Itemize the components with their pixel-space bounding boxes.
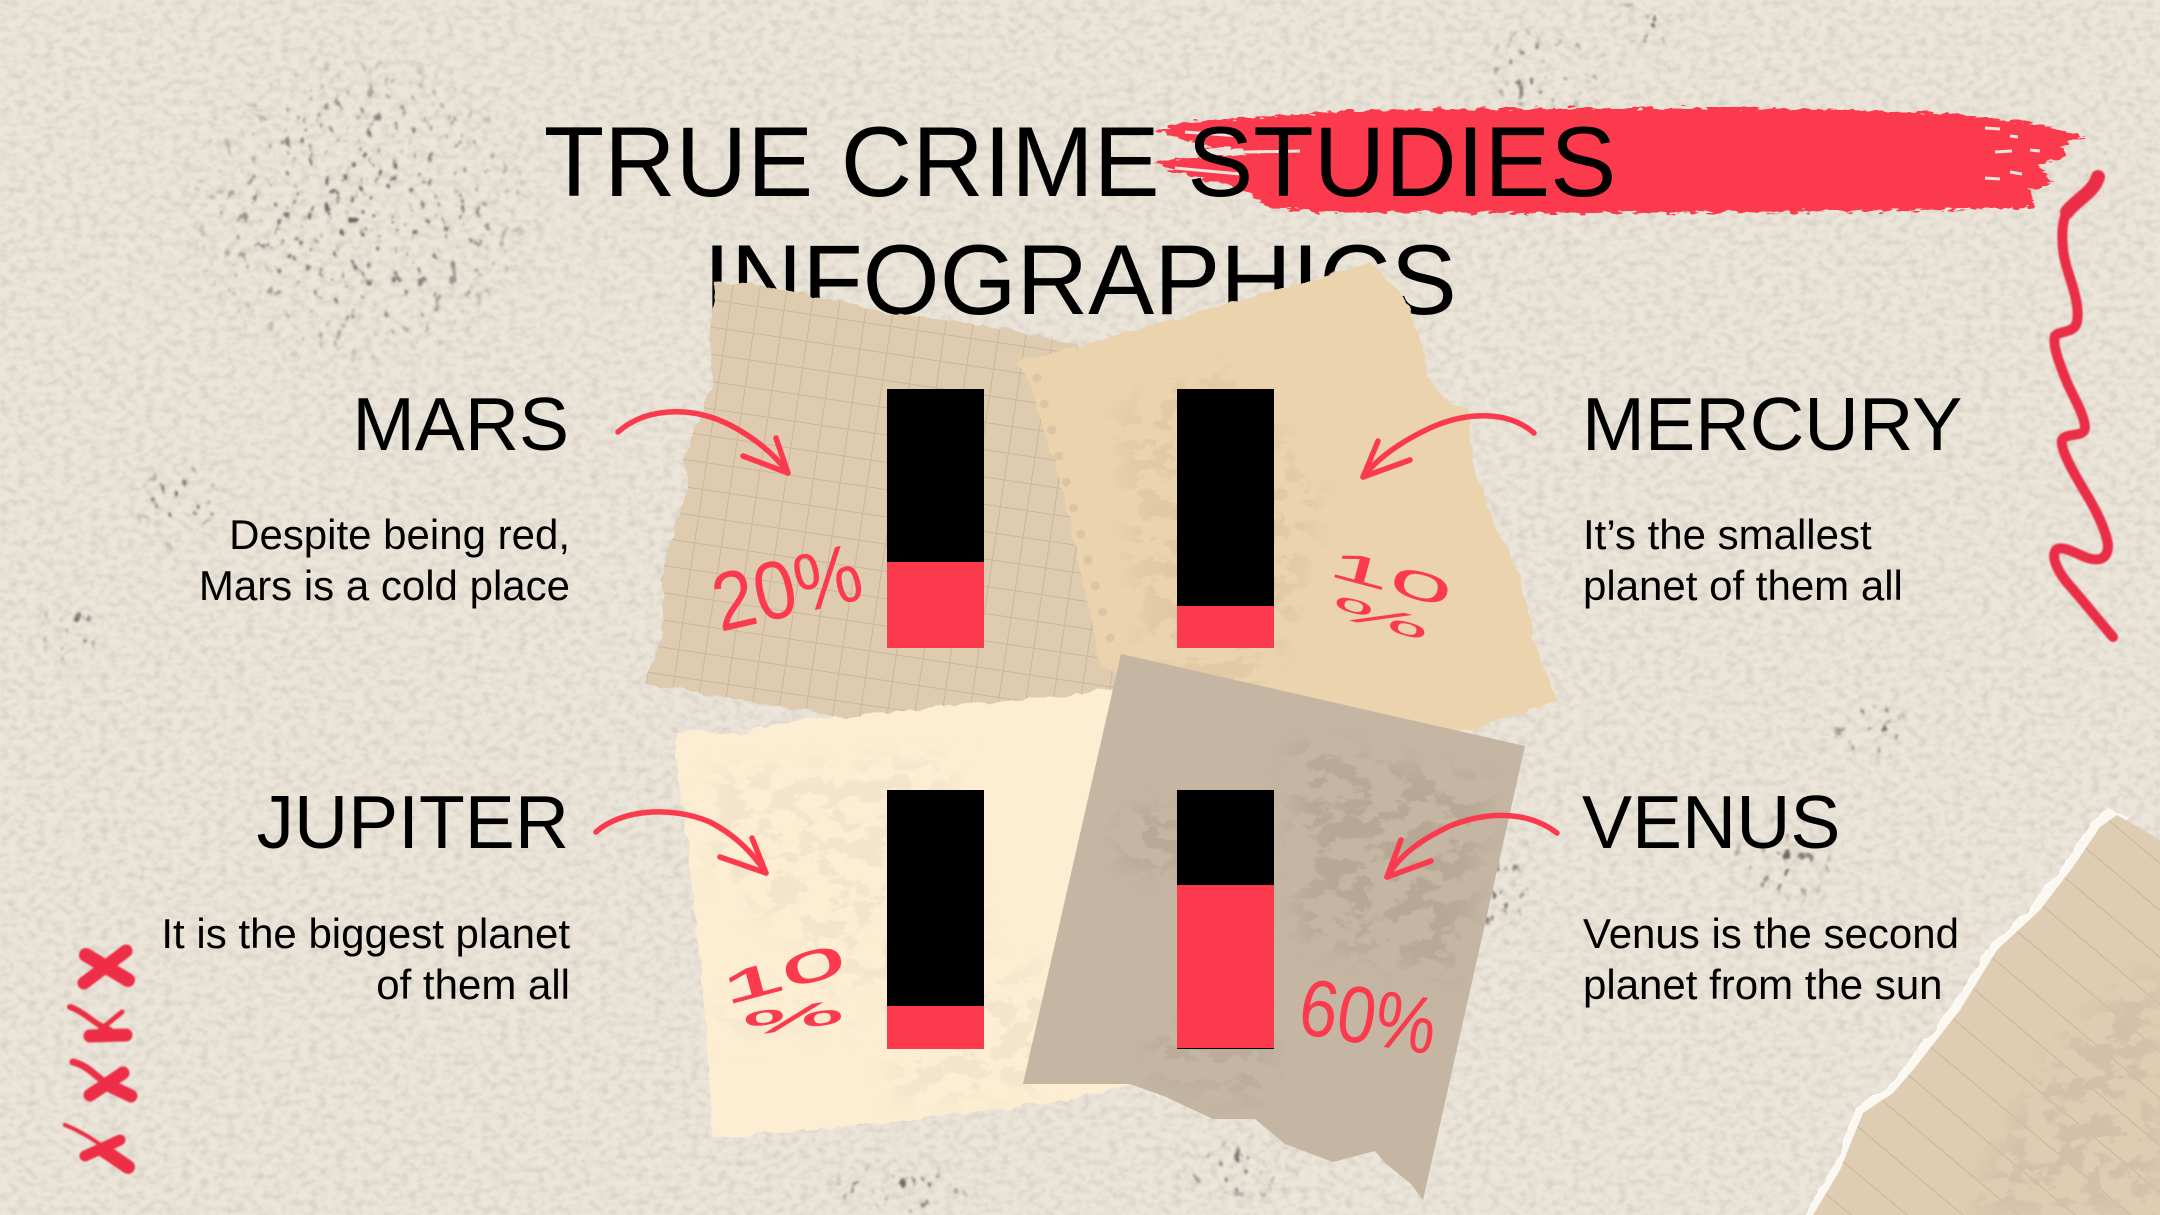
percent label: Jupiter 10%: % (741, 993, 846, 1043)
description: Mercury: planet of them all (1583, 562, 1903, 609)
bar chart: Venus 60% (1177, 790, 1274, 1049)
cross 1 (84, 951, 128, 983)
spiral holes (1037, 378, 1112, 645)
paper: Venus grey-brown sheet (1023, 654, 1525, 1200)
block: Mars (199, 382, 570, 609)
paper: Jupiter cream sheet (674, 688, 1160, 1138)
heading: Mars: MARS (352, 382, 569, 466)
arrow: Venus (1387, 815, 1557, 877)
bar chart: Mars 20% (887, 389, 984, 648)
heading: Jupiter: JUPITER (256, 780, 569, 864)
arrow: Mars (618, 412, 788, 473)
torn lined paper corner (1800, 800, 2160, 1215)
block: Venus (1582, 780, 1959, 1008)
block: Jupiter (161, 780, 570, 1008)
heading: Venus: VENUS (1582, 780, 1840, 864)
bar chart: Mercury 10% (1177, 389, 1274, 648)
description: Mars: Mars is a cold place (199, 562, 570, 609)
percent label: Venus 60%: 60% (1293, 961, 1443, 1071)
cross 2 (70, 1007, 126, 1036)
percent label: Jupiter 10%: 10 (716, 935, 850, 1014)
heading: Mercury: MERCURY (1582, 382, 1962, 466)
percent label: Mars 20%: 20% (703, 526, 871, 649)
red cross marks (65, 951, 131, 1167)
title: TRUE CRIME STUDIES (544, 106, 1616, 217)
description: Mars: Despite being red, (229, 511, 570, 558)
title: INFOGRAPHICS (703, 224, 1457, 335)
red squiggle (2054, 177, 2113, 637)
description: Venus: Venus is the second (1583, 910, 1959, 957)
description: Mercury: It’s the smallest (1583, 511, 1872, 558)
paper: Mars grid sheet (644, 281, 1116, 719)
description: Jupiter: of them all (376, 961, 570, 1008)
percent label: Mercury 10%: 10 (1324, 540, 1457, 616)
arrow: Mercury (1363, 416, 1534, 477)
description: Jupiter: It is the biggest planet (161, 910, 570, 957)
arrow: Jupiter (596, 812, 766, 873)
bar chart: Jupiter 10% (887, 790, 984, 1049)
paper: Mercury tan sheet (1016, 263, 1558, 760)
block: Mercury (1582, 382, 1962, 609)
red brush stroke (1151, 108, 2085, 213)
cross 3 (73, 1062, 131, 1096)
percent label: Mercury 10%: % (1327, 588, 1434, 648)
description: Venus: planet from the sun (1583, 961, 1943, 1008)
cross 4 (65, 1125, 128, 1167)
